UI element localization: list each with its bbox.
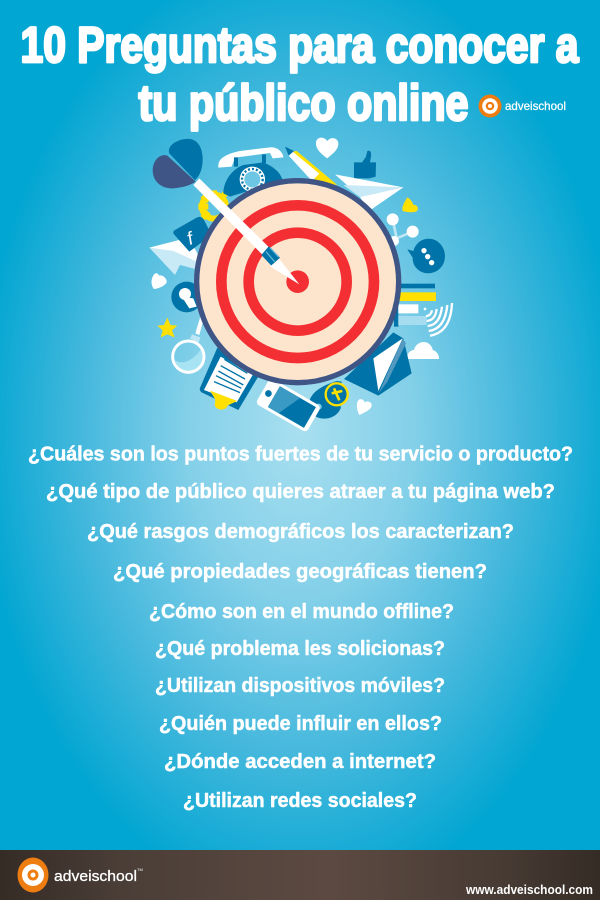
questions list [28, 442, 573, 812]
icon: clipboard [200, 348, 258, 410]
icon: smartphone [255, 377, 321, 433]
icon: heart left [151, 273, 167, 289]
questions list: ¿Qué problema les solicionas? [155, 637, 445, 660]
icon: chart bars [394, 284, 436, 327]
icon: gear [198, 190, 226, 219]
icon: facebook tile: f [186, 227, 195, 249]
icon: profile circle [171, 282, 202, 312]
questions list: ¿Qué tipo de público quieres atraer a tu página web? [46, 480, 555, 503]
icon: speech bubble [407, 239, 445, 273]
icon: facebook tile [173, 217, 212, 252]
icon: star [157, 318, 177, 337]
questions list: ¿Qué propiedades geográficas tienen? [113, 560, 487, 583]
icon: telephone [218, 147, 283, 197]
logo: adveischool small [478, 94, 566, 118]
footer bar [0, 850, 600, 900]
logo: adveischool footer: adveischool [54, 868, 137, 885]
title: tu público online [138, 74, 468, 131]
questions list: ¿Dónde acceden a internet? [164, 750, 436, 773]
icon: pencil [285, 147, 337, 185]
icon: arrow plane left [149, 238, 199, 275]
logo: adveischool footer [18, 858, 143, 892]
questions list: ¿Cuáles son los puntos fuertes de tu servicio o producto? [28, 442, 573, 466]
questions list: ¿Utilizan dispositivos móviles? [155, 674, 445, 697]
icon: magnifier [173, 316, 204, 372]
icon: heart top [316, 138, 338, 158]
illustration: target and icons [149, 138, 452, 433]
icon: yellow circle badge [309, 381, 348, 419]
icon: thumbs up [354, 151, 376, 178]
icon: dart [153, 139, 299, 284]
icon: cloud [407, 342, 439, 359]
target [197, 181, 399, 383]
questions list: ¿Utilizan redes sociales? [183, 789, 417, 812]
questions list: ¿Cómo son en el mundo offline? [149, 600, 454, 623]
questions list: ¿Quién puede influir en ellos? [159, 712, 442, 735]
logo: adveischool small: adveischool [505, 99, 566, 113]
icon: heart bottom [357, 399, 372, 415]
icon: wifi waves [424, 303, 452, 336]
icon: paper plane [335, 174, 403, 210]
logo: adveischool footer: TM [137, 867, 143, 872]
questions list: ¿Qué rasgos demográficos los caracterizan? [87, 520, 514, 543]
title [20, 16, 579, 131]
icon: network nodes [387, 213, 419, 246]
icon: envelope [344, 332, 412, 396]
icon: small yellow heart [402, 197, 418, 212]
